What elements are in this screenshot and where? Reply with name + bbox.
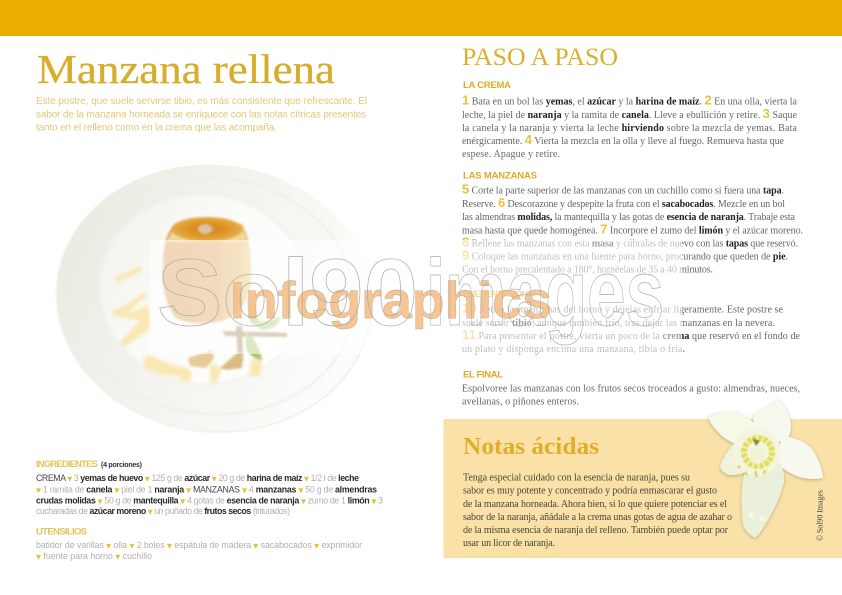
section: el final: [462, 370, 800, 408]
ingredients list: crudas molidas ▼ 50 g de mantequilla ▼ 4 gotas de esencia de naranja ▼ zumo de 1 limón ▼ 3: [36, 496, 383, 506]
panel text: de la misma esencia de naranja del relleno. También puede optar por: [463, 525, 729, 536]
section: presentación: 10 Retire las manzanas del horno y déjelas enfriar ligeramente. Este postre se: [462, 300, 784, 316]
photo: plate with stuffed apple: [43, 149, 385, 448]
watermark: sol90images: Sol90: [157, 240, 418, 346]
section: las manzanas: 9 Coloque las manzanas en una fuente para horno, procurando que queden de pie.: [462, 248, 788, 262]
panel text: sabor de la naranja, añádale a la crema unas gotas de agua de azahar o: [463, 512, 732, 523]
panel text: usar un licor de naranja.: [463, 538, 555, 549]
utensils: [36, 526, 362, 561]
panel heading: Notas ácidas: [463, 434, 599, 460]
section: la crema: LA CREMA: [463, 80, 511, 91]
section: presentación: un plato y disponga encima una manzana, tibia o fría.: [462, 344, 685, 355]
section: presentación: [462, 288, 801, 355]
section: presentación: PRESENTACIÓN: [463, 288, 528, 300]
section: presentación: suele servir tibio, aunque también frío, tras dejar las manzanas en la nevera.: [462, 318, 775, 329]
section: las manzanas: Con el horno precalentado a 180°, hornéelas de 35 a 40 minutos.: [462, 264, 713, 276]
section: las manzanas: Reserve. 6 Descorazone y despepite la fruta con el sacabocados. Mezcle en un bol: [462, 195, 785, 210]
intro text: Este postre, que suele servirse tibio, es más consistente que refrescante. El: [36, 96, 367, 107]
utensils heading: UTENSILIOS: [36, 526, 87, 538]
intro text: tanto en el relleno como en la crema que las acompaña.: [36, 122, 277, 134]
ingredients portions: (4 porciones): [101, 462, 142, 469]
panel text: Tenga especial cuidado con la esencia de naranja, pues su: [463, 472, 690, 484]
section: las manzanas: LAS MANZANAS: [463, 170, 537, 182]
ingredients list: CREMA ▼ 3 yemas de huevo ▼ 125 g de azúcar ▼ 20 g de harina de maíz ▼ 1/2 l de leche: [36, 473, 359, 483]
section: las manzanas: las almendras molidas, la mantequilla y las gotas de esencia de naranja. Trabaje esta: [462, 212, 796, 223]
utensils list: batidor de varillas ▼ olla ▼ 2 boles ▼ espátula de madera ▼ sacabocados ▼ exprimidor: [36, 540, 362, 550]
panel text: sabor es muy potente y concentrado y podría enmascarar el gusto: [463, 486, 717, 496]
utensils list: ▼ fuente para horno ▼ cuchillo: [36, 551, 152, 561]
section: las manzanas: masa hasta que quede homogénea. 7 Incorpore el zumo del limón y el azúcar moreno.: [462, 222, 803, 236]
section: la crema: espese. Apague y retire.: [462, 149, 560, 160]
watermark: sol90images: images: [426, 240, 664, 346]
ingredients: [36, 459, 383, 516]
section: la crema: enérgicamente. 4 Vierta la mezcla en la olla y lleve al fuego. Remueva hasta que: [462, 132, 785, 147]
section: las manzanas: [462, 170, 803, 276]
top bar: [0, 0, 842, 36]
watermark: infographics: Infographics: [230, 272, 552, 330]
watermark: sol90images: [157, 240, 664, 346]
section: la crema: la canela y la naranja y vierta la leche hirviendo sobre la mezcla de yemas. Bata: [462, 123, 798, 134]
section: el final: EL FINAL: [463, 370, 503, 380]
title: Manzana rellena: [37, 46, 335, 92]
section: la crema: [462, 80, 798, 160]
panel text: de la manzana horneada. Ahora bien, si lo que quiere potenciar es el: [463, 499, 727, 510]
ingredients heading: INGREDIENTES: [36, 459, 98, 470]
watermark band: [150, 240, 682, 354]
heading: paso a paso: PASO A PASO: [462, 44, 618, 71]
section: presentación: 11 Para presentar el postre, vierta un poco de la crema que reservó en el fondo de: [462, 327, 801, 342]
photo credit: © Sol90 Images: [816, 490, 824, 541]
section: las manzanas: 5 Corte la parte superior de las manzanas con un cuchillo como si fuera una tapa.: [462, 182, 784, 196]
icon: orange blossom: [708, 399, 823, 538]
intro text: [36, 96, 367, 134]
panel: notas ácidas: [444, 399, 842, 558]
section: el final: avellanas, o piñones enteros.: [462, 396, 579, 408]
ingredients list: [36, 473, 383, 516]
section: el final: Espolvoree las manzanas con los frutos secos troceados a gusto: almendras, nueces,: [462, 384, 800, 394]
section: la crema: leche, la piel de naranja y la ramita de canela. Lleve a ebullición y retire. 3 Saque: [462, 106, 798, 121]
section: la crema: 1 Bata en un bol las yemas, el azúcar y la harina de maíz. 2 En una olla, vierta la: [462, 92, 798, 108]
intro text: sabor de la manzana horneada se enriquece con las notas cítricas presentes: [36, 110, 366, 120]
ingredients list: ▼ 1 ramita de canela ▼ piel de 1 naranja ▼ MANZANAS ▼ 4 manzanas ▼ 50 g de almendras: [36, 484, 377, 494]
utensils list: [36, 540, 362, 561]
section: las manzanas: 8 Rellene las manzanas con esta masa y cúbralas de nuevo con las tapas que reservó.: [462, 234, 798, 250]
ingredients list: cucharadas de azúcar moreno ▼ un puñado de frutos secos (triturados): [36, 506, 290, 516]
panel text: [463, 472, 732, 549]
